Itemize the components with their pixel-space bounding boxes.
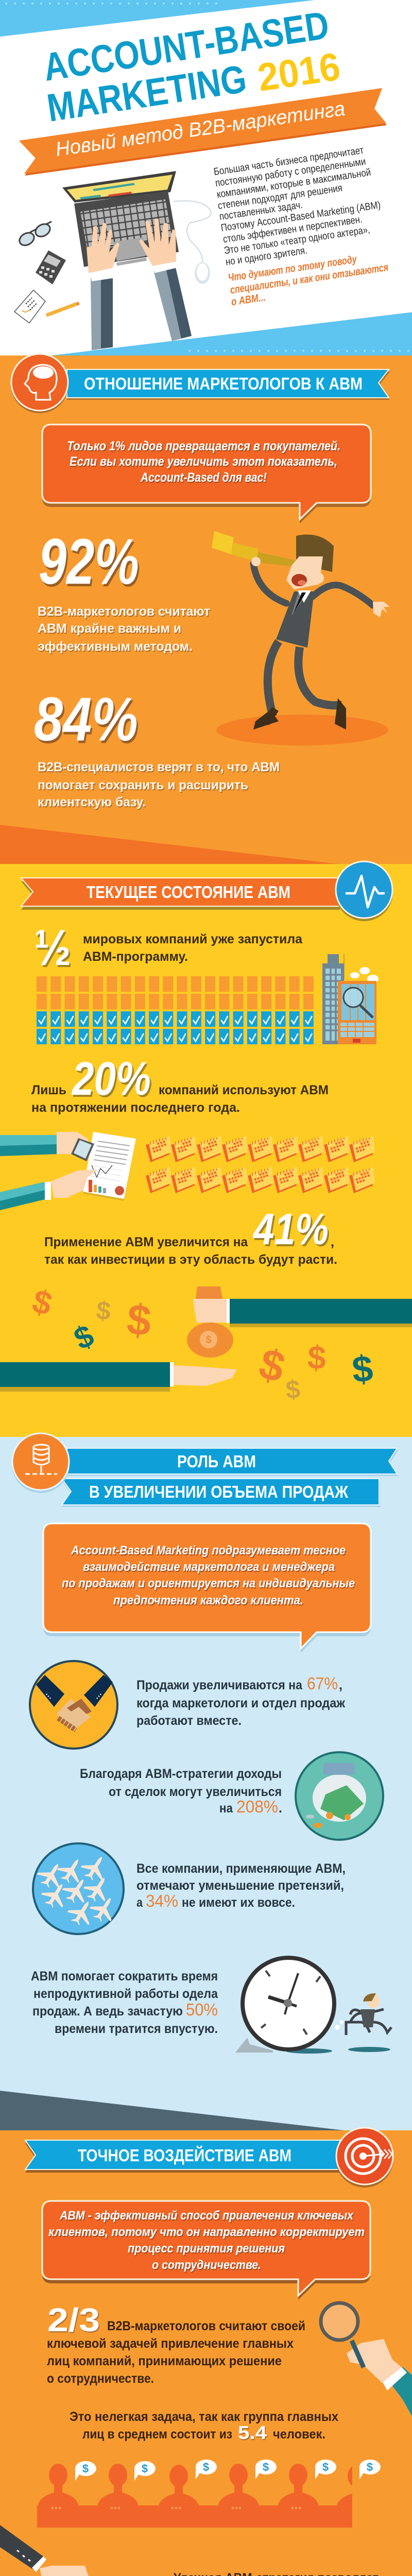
icon: database — [12, 1433, 70, 1493]
callout: взаимодействие маркетолога и менеджера — [83, 1560, 335, 1574]
stat 67%: , — [339, 1678, 342, 1692]
stat 20%: компаний используют АВМ — [159, 1083, 329, 1097]
section heading: В УВЕЛИЧЕНИИ ОБЪЕМА ПРОДАЖ — [89, 1482, 348, 1501]
title: 2016 — [255, 45, 343, 100]
icon: group of decision makers: $ — [263, 2461, 269, 2473]
stat 92%: эффективным методом. — [38, 639, 193, 654]
callout: АВМ - эффективный способ привлечения ключевых — [59, 2209, 354, 2223]
icon: man with telescope — [212, 531, 390, 745]
callout: Account-Based для вас! — [140, 470, 267, 485]
icon: dollar signs: $ — [254, 1339, 290, 1392]
panel: current state — [0, 861, 412, 1437]
icon: handshake — [30, 1661, 117, 1749]
icon: target — [336, 2128, 393, 2188]
icon: head with brain — [11, 354, 68, 413]
icon: group of decision makers: $ — [82, 2462, 89, 2475]
stat 50%: непродуктивной работы одела — [33, 1987, 218, 2001]
stat 67%: когда маркетологи и отдел продаж — [136, 1696, 345, 1710]
intro text: компаниями, которые в максимальной — [216, 167, 372, 200]
icon: calendars — [146, 1136, 375, 1193]
icon: pulse — [335, 861, 393, 921]
stat two thirds: о сотрудничестве. — [47, 2371, 154, 2386]
icon: laptop with hands — [62, 171, 211, 350]
section heading: ОТНОШЕНИЕ МАРКЕТОЛОГОВ К АВМ — [84, 374, 363, 393]
icon: group of decision makers — [37, 2460, 381, 2528]
icon: dollar signs: $ — [125, 1295, 153, 1345]
stat 84%: помогает сохранить и расширить — [38, 778, 248, 792]
stat 20%: на протяжении последнего года. — [31, 1100, 240, 1115]
icon: money bag between hands: $ — [205, 1334, 212, 1346]
title — [41, 3, 343, 130]
callout: о сотрудничестве. — [152, 2258, 261, 2272]
intro text: постоянную работу с определенными — [215, 156, 367, 189]
stat 20% — [31, 1053, 329, 1115]
stat 208%: Благодаря АВМ-стратегии доходы — [80, 1767, 282, 1781]
stat 67%: работают вместе. — [136, 1714, 242, 1728]
stat one half — [34, 919, 303, 976]
icon: planes — [33, 1843, 124, 1934]
icon: group of decision makers: $ — [142, 2462, 148, 2475]
intro text: поставленных задач. — [219, 199, 303, 223]
stat two thirds: лиц компаний, принимающих решение — [47, 2354, 282, 2368]
intro text: Это не только «театр одного актера», — [224, 224, 371, 257]
stat 34%: а — [136, 1895, 143, 1910]
stat 84%: клиентскую базу. — [38, 795, 146, 809]
icon: hand with magnifier — [321, 2303, 412, 2416]
stat 5.4 people: 5.4 — [238, 2422, 267, 2443]
stat 34%: Все компании, применяющие АВМ, — [136, 1861, 346, 1876]
callout: клиентов, потому что он направленно корректирует — [48, 2225, 365, 2239]
stat 84%: 84% — [34, 685, 138, 754]
stat 50%: времени тратится впустую. — [55, 2022, 218, 2036]
stat 5.4 people: человек. — [273, 2427, 325, 2442]
icon: money bag between hands — [0, 1286, 412, 1392]
icon: dollar signs: $ — [28, 1282, 56, 1323]
section heading: ТЕКУЩЕЕ СОСТОЯНИЕ АВМ — [87, 883, 290, 902]
stat 67%: 67% — [307, 1674, 338, 1693]
icon: dollar signs: $ — [95, 1296, 112, 1326]
section heading — [62, 1448, 398, 1507]
stat 92%: 92% — [39, 526, 139, 598]
subtitle ribbon: Новый метод B2B-маркетинга — [54, 97, 347, 161]
panel: precise targeting — [0, 2128, 412, 2576]
callout: предпочтения каждого клиента. — [113, 1594, 303, 1607]
stat 5.4 people: лиц в среднем состоит из — [82, 2427, 232, 2442]
stat two thirds — [47, 2301, 305, 2386]
stat 84% — [34, 685, 280, 809]
icon: group of decision makers: $ — [203, 2461, 209, 2473]
section heading: РОЛЬ АВМ — [177, 1452, 256, 1471]
icon: notepad and pencil — [14, 290, 80, 323]
icon: dollar signs: $ — [69, 1318, 99, 1357]
stat one half: мировых компаний уже запустила — [83, 932, 303, 946]
icon: dollar signs: $ — [285, 1375, 301, 1404]
stat one half: ½ — [34, 919, 71, 976]
intro text: Что думают по этому поводу — [227, 253, 358, 284]
stat 41%: 41% — [252, 1205, 329, 1254]
title: MARKETING — [44, 57, 249, 130]
section heading — [25, 2140, 340, 2173]
intro text: столь эффективен и перспективен. — [222, 214, 363, 245]
intro text: но и одного зрителя. — [225, 245, 308, 268]
panel: role of ABM — [0, 1433, 412, 2130]
stat 5.4 people — [70, 2410, 338, 2443]
stat 20%: Лишь — [31, 1083, 66, 1097]
icon: group of decision makers: $ — [367, 2461, 373, 2473]
icon: dollar signs — [28, 1282, 374, 1404]
intro text: Большая часть бизнеса предпочитает — [213, 145, 365, 178]
stat 208% — [80, 1767, 282, 1816]
stat 41%: Применение АВМ увеличится на — [44, 1235, 248, 1249]
stat 34%: 34% — [146, 1891, 178, 1910]
stat two thirds: B2B-маркетологов считают своей — [107, 2319, 305, 2333]
stat 208%: на — [219, 1801, 233, 1816]
stat 92% — [38, 526, 210, 654]
panel: attitude of marketers — [0, 354, 412, 864]
icon: glasses — [18, 222, 52, 248]
icon: buildings with magnifier — [322, 954, 379, 1044]
icon: group of decision makers: $ — [322, 2461, 329, 2473]
intro text: Поэтому Account-Based Marketing (ABM) — [220, 199, 381, 234]
callout: Если вы хотите увеличить этот показатель, — [70, 454, 337, 469]
stat 208%: 208% — [236, 1797, 278, 1816]
section heading — [67, 369, 390, 400]
icon: clock and running man — [235, 1956, 391, 2054]
stat 34%: отмечают уменьшение претензий, — [136, 1878, 344, 1893]
stat two thirds: ключевой задачей привлечение главных — [47, 2336, 294, 2351]
stat one half: АВМ-программу. — [83, 950, 188, 964]
callout — [42, 2201, 370, 2300]
stat 41%: так как инвестиции в эту область будут расти. — [44, 1252, 337, 1267]
stat 50% — [31, 1969, 218, 2036]
stat 50%: АВМ помогает сократить время — [31, 1969, 218, 1984]
callout — [42, 425, 371, 523]
stat 208%: . — [279, 1801, 282, 1816]
stat 34% — [136, 1861, 346, 1910]
stat 34%: не имеют их вовсе. — [182, 1895, 295, 1910]
stat 67%: Продажи увеличиваются на — [136, 1678, 303, 1692]
callout: Account-Based Marketing подразумевает тесное — [71, 1544, 346, 1557]
callout — [43, 1523, 371, 1653]
stat 92%: АВМ крайне важным и — [38, 621, 181, 636]
stat 41%: , — [331, 1235, 334, 1249]
icon: dollar signs: $ — [351, 1348, 374, 1391]
panel: intro — [0, 0, 412, 357]
icon: hands with report — [0, 1132, 136, 1210]
stat 5.4 people: Это нелегкая задача, так как группа главных — [70, 2410, 338, 2424]
stat 41% — [44, 1205, 337, 1267]
callout: процесс принятия решения — [128, 2242, 285, 2256]
section heading — [21, 878, 340, 910]
stat 67% — [136, 1674, 345, 1728]
icon: hand with chess pieces — [0, 2525, 139, 2576]
stat two thirds: 2/3 — [47, 2301, 100, 2338]
subtitle ribbon — [19, 88, 387, 176]
stat 208%: от сделок могут увеличиться — [109, 1785, 282, 1799]
section heading: ТОЧНОЕ ВОЗДЕЙСТВИЕ АВМ — [78, 2145, 291, 2165]
icon: jar of money — [296, 1752, 383, 1840]
icon: dollar signs: $ — [306, 1338, 327, 1377]
intro text: о ABM... — [230, 292, 266, 308]
callout: Только 1% лидов превращается в покупателей. — [67, 439, 340, 453]
chart: checked companies grid — [37, 976, 314, 1044]
stat 92%: B2B-маркетологов считают — [38, 604, 210, 619]
intro text — [213, 145, 389, 308]
icon: calculator — [36, 250, 66, 284]
intro text: степени подходят для решения — [217, 182, 343, 212]
stat 20%: 20% — [71, 1053, 151, 1105]
stat 50%: продаж. А ведь зачастую — [32, 2004, 183, 2019]
stat 50%: 50% — [186, 2000, 218, 2019]
callout: по продажам и ориентируется на индивидуальные — [62, 1577, 355, 1590]
stat 84%: B2B-специалистов верят в то, что АВМ — [38, 760, 280, 774]
